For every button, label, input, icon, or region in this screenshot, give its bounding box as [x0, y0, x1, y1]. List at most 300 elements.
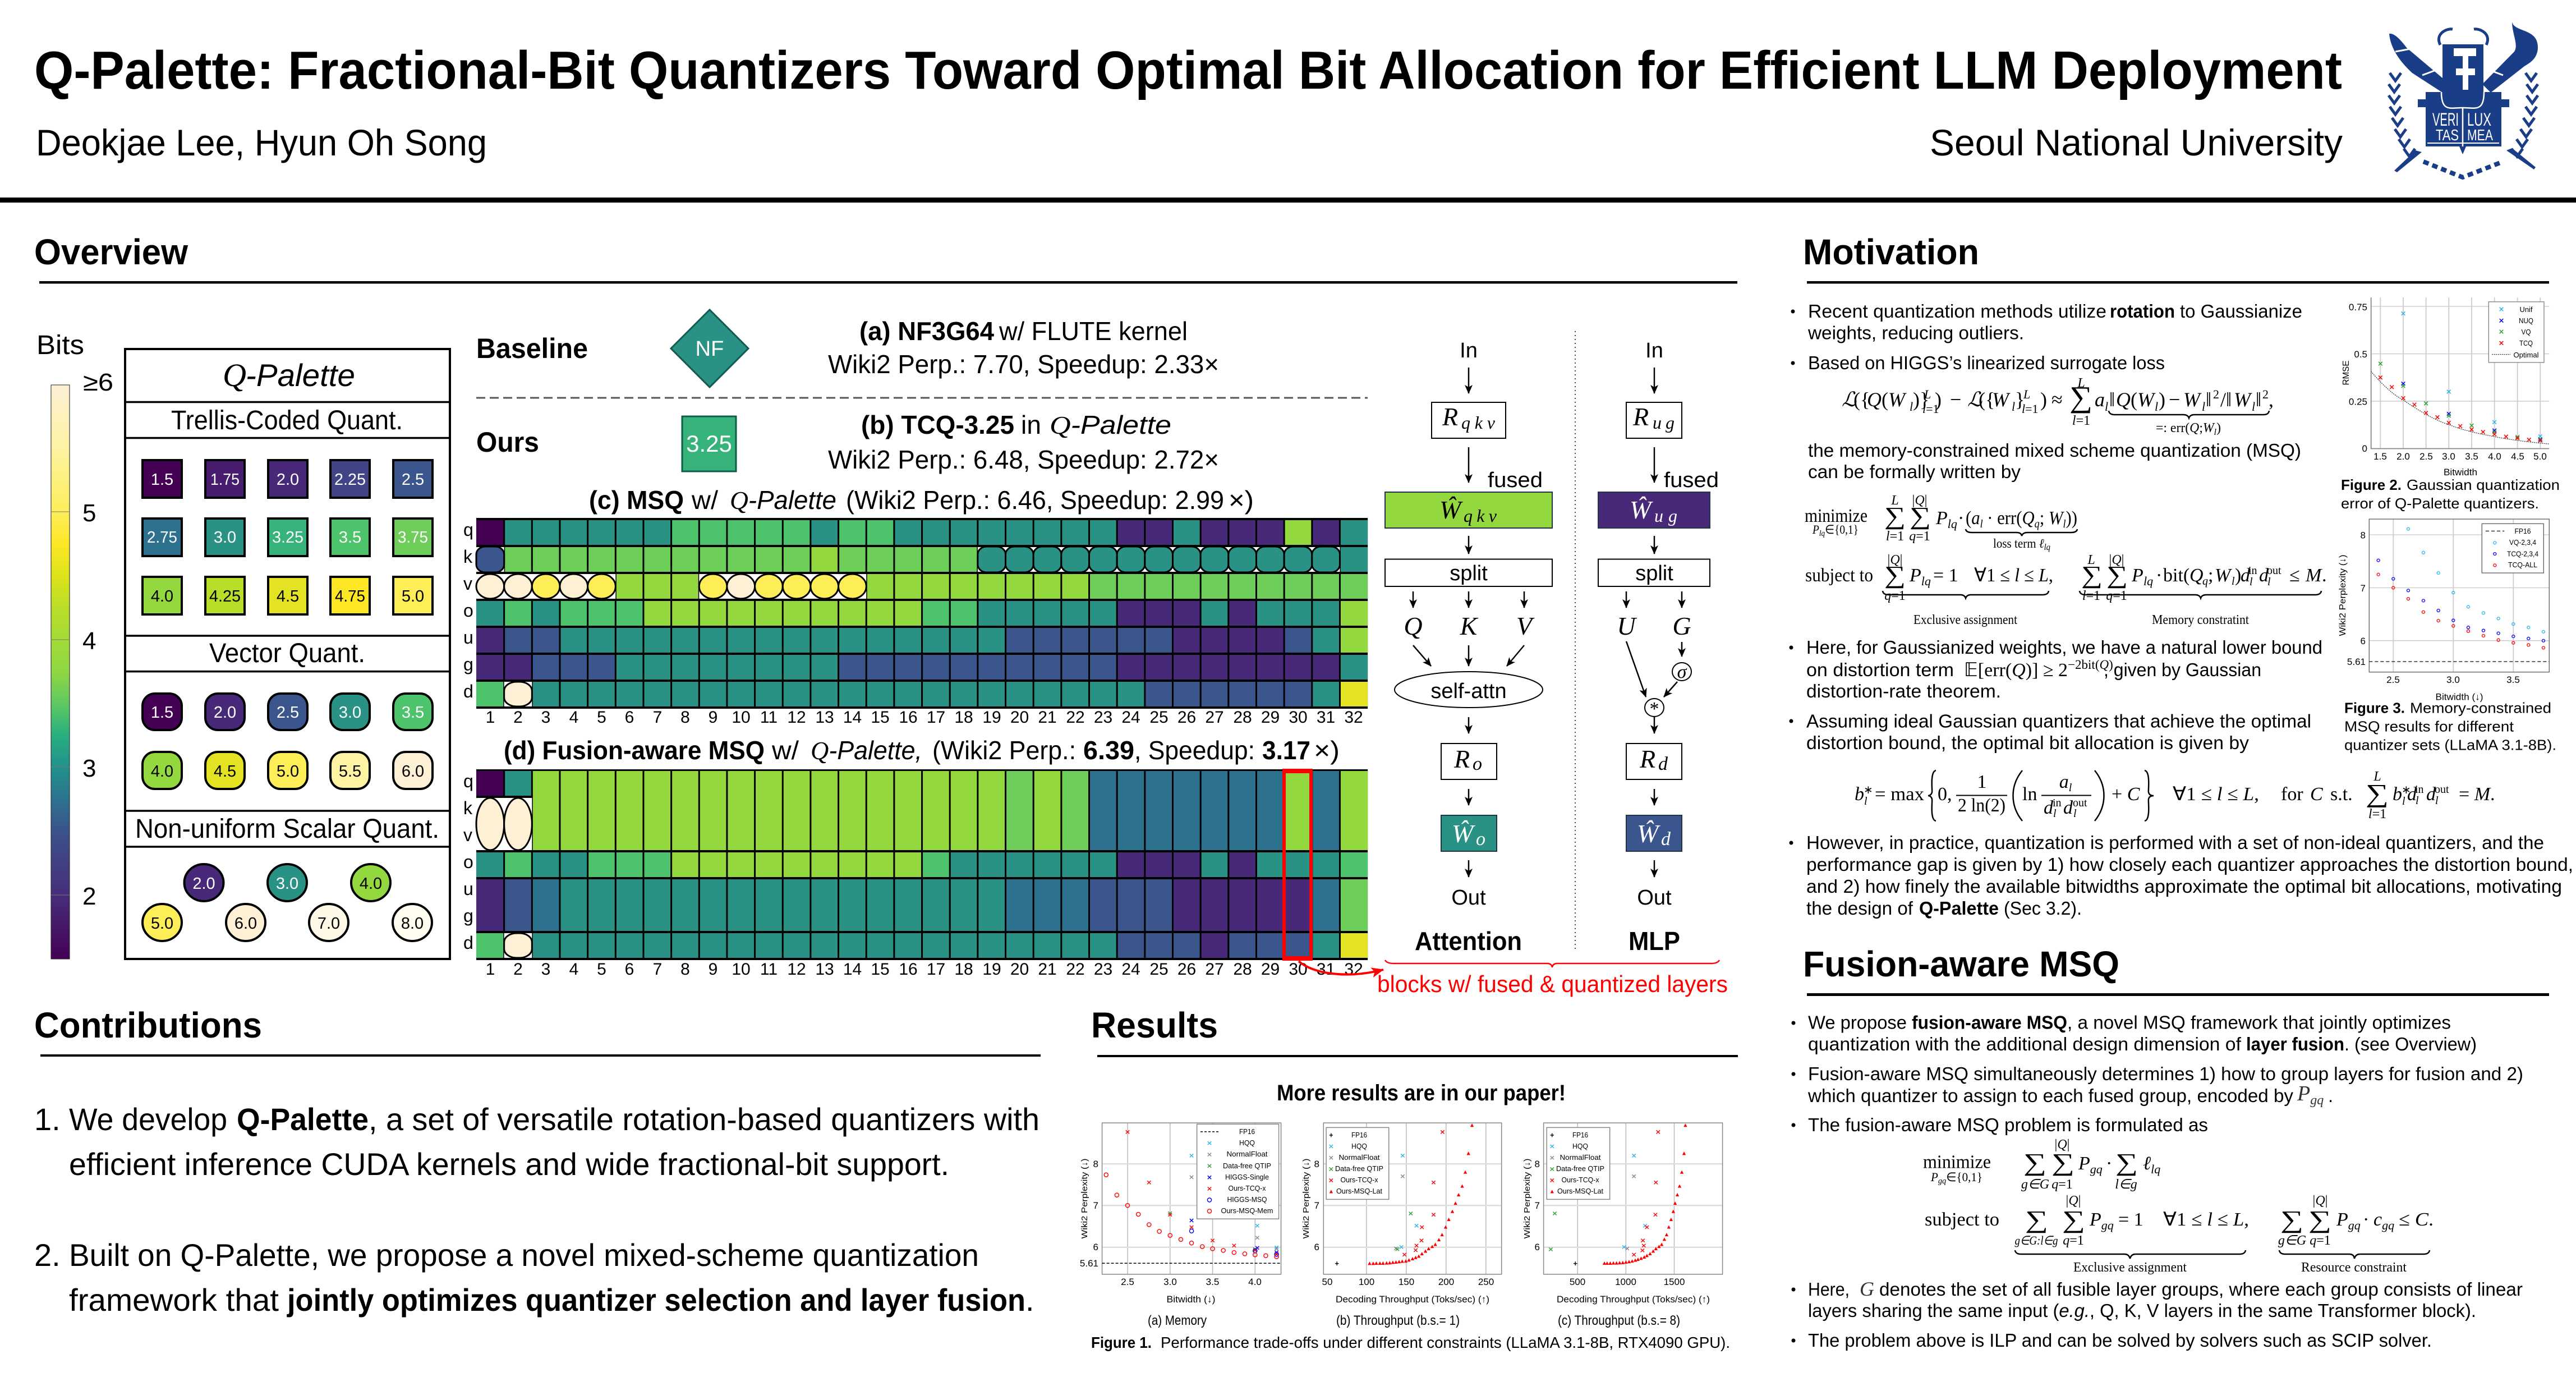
equation: surrogate loss: L — [1924, 387, 1931, 401]
chart: (b) Throughput b.s.=1: (b) Throughput (b.s.= 1) — [1336, 1313, 1460, 1328]
chart: (a) Memory: Ours-TCQ-x — [1229, 1184, 1266, 1192]
chart: Figure 3 quantizer sets: 7 — [2361, 583, 2366, 594]
column labels (d): 23 — [1094, 960, 1112, 979]
equation: surrogate loss: ( — [2131, 388, 2137, 411]
column labels (c): 24 — [1121, 708, 1140, 727]
chart: Figure 2 RMSE — [2342, 297, 2549, 478]
equation: MSQ optimization: d — [2241, 565, 2251, 586]
caption: Figure 2: error of Q-Palette quantizers. — [2341, 495, 2539, 512]
equation: fusion-aware optimization: gq — [2382, 1218, 2394, 1232]
chart: (b) Throughput b.s.=1: Decoding Throughput (Toks/sec) (↑) — [1336, 1294, 1489, 1305]
equation: optimal bit allocation: ∗ — [1864, 784, 1873, 796]
equation: surrogate loss: L — [2077, 376, 2085, 391]
equation: fusion-aware optimization: minimize — [1923, 1151, 1991, 1173]
chart: Figure 2 RMSE: 5.0 — [2533, 451, 2547, 462]
equation: fusion-aware optimization: gq — [1938, 1177, 1947, 1186]
swatch labels: vector: 5.0 — [277, 763, 299, 781]
equation: surrogate loss: /‖ — [2220, 388, 2232, 411]
labels: Q K V: Q — [1404, 612, 1423, 640]
bullet: grouping: P — [2297, 1082, 2310, 1105]
equation: surrogate loss: ) — [1935, 388, 1942, 411]
equation: fusion-aware optimization: gq — [2101, 1218, 2114, 1232]
equation: MSQ optimization: P — [1910, 565, 1921, 586]
row labels (d): v — [463, 825, 472, 845]
chart: (c) Throughput b.s.=8 — [1522, 1123, 1723, 1328]
column labels (c): 9 — [709, 708, 717, 727]
contribution 2: Built on Q-Palette, we propose a novel mixed-scheme quantization — [69, 1237, 979, 1273]
column labels (d): 1 — [486, 960, 495, 979]
diagram: MLP block — [1598, 339, 1719, 956]
column labels (c): 12 — [787, 708, 806, 727]
icon: university emblem: VERI — [2432, 109, 2459, 130]
chart: (b) Throughput b.s.=1: 200 — [1438, 1277, 1454, 1287]
bullet: rotation: weights, reducing outliers. — [1807, 322, 2024, 343]
chart: (c) Throughput b.s.=8: NormalFloat — [1560, 1153, 1601, 1162]
equation: MSQ optimization: . — [2322, 565, 2327, 586]
chart: (b) Throughput b.s.=1: 250 — [1478, 1277, 1494, 1287]
chart: Figure 3 quantizer sets: VQ-2,3,4 — [2509, 538, 2536, 547]
chart: (b) Throughput b.s.=1: 100 — [1359, 1277, 1374, 1287]
swatch labels: vector — [151, 704, 424, 781]
section: Contributions: Contributions — [34, 1005, 262, 1045]
label: fused: fused — [1488, 469, 1543, 492]
equation: MSQ optimization: L — [2087, 553, 2095, 567]
box: W ug: ug — [1654, 506, 1677, 526]
chart: (b) Throughput b.s.=1: 150 — [1399, 1277, 1414, 1287]
equation: MSQ optimization: |Q| — [1888, 553, 1902, 567]
node: self-attn — [1395, 672, 1543, 708]
equation: surrogate loss: ) — [2040, 388, 2047, 411]
bullet: layer groups: layers sharing the same input (e.g., Q, K, V layers in the same Transformer block). — [1808, 1300, 2476, 1321]
equation: fusion-aware optimization: ∑ — [2023, 1149, 2046, 1176]
swatch labels: trellis-coded: 3.0 — [214, 529, 236, 547]
equation: fusion-aware optimization: ∑ — [2025, 1206, 2048, 1233]
equation: MSQ optimization: ≤ — [2289, 565, 2300, 586]
swatches: trellis-coded — [142, 460, 433, 614]
equation: fusion-aware optimization: ≤ C. — [2399, 1209, 2434, 1230]
chart: (c) Throughput b.s.=8: HQQ — [1572, 1142, 1588, 1150]
labels: Q K V: V — [1516, 612, 1535, 640]
bullet: formulation: The fusion-aware MSQ problem is formulated as — [1808, 1114, 2208, 1135]
chart: Figure 2 RMSE: 1.5 — [2373, 451, 2387, 462]
equation: MSQ optimization: ∑ — [1884, 561, 1906, 589]
chart: Figure 2 RMSE: 0.25 — [2349, 396, 2367, 407]
column labels (c): 10 — [732, 708, 751, 727]
panel: Q-Palette quantizer legend — [125, 349, 450, 959]
bullet: grouping: . — [2328, 1085, 2333, 1106]
equation: fusion-aware optimization: P — [2078, 1153, 2090, 1174]
bullet: layer groups: Here, — [1808, 1279, 1850, 1300]
equation: surrogate loss: ∑ — [2069, 381, 2092, 414]
colorbar: Bits: ≥6 — [83, 369, 113, 396]
column labels (d): 12 — [787, 960, 806, 979]
title: Q-Palette: Fractional-Bit Quantizers Toward Optimal Bit Allocation for Efficient LLM Deployment — [34, 40, 2342, 100]
equation: MSQ optimization: q — [2202, 575, 2208, 588]
equation: surrogate loss: =: err(Q;W — [2156, 421, 2214, 435]
equation: MSQ optimization: ∈{0,1} — [1825, 522, 1859, 536]
row labels (d): k — [463, 798, 473, 818]
equation: surrogate loss: − — [1950, 388, 1961, 411]
contribution 1: , a set of versatile rotation-based quantizers with — [369, 1102, 1039, 1137]
swatch labels: vector: 2.0 — [214, 704, 236, 722]
callout: blocks with fused and quantized layers: blocks w/ fused & quantized layers — [1377, 971, 1728, 997]
column labels (c): 30 — [1289, 708, 1308, 727]
equation: optimal bit allocation: ∑ — [2366, 779, 2389, 807]
equation: fusion-aware optimization: g∈G — [2021, 1177, 2049, 1192]
column labels (d): 5 — [597, 960, 606, 979]
column labels (d): 28 — [1233, 960, 1252, 979]
chart: (c) Throughput b.s.=8: Ours-MSQ-Lat — [1557, 1187, 1603, 1195]
box: W qkv — [1385, 492, 1552, 528]
equation: optimal bit allocation — [1855, 769, 2495, 821]
equation: optimal bit allocation: out — [2435, 783, 2449, 796]
box: split — [1385, 559, 1552, 586]
equation: MSQ optimization: q=1 — [2106, 589, 2127, 603]
chart: (c) Throughput b.s.=8: 1500 — [1664, 1277, 1685, 1287]
swatches: vector — [142, 694, 433, 789]
equation: fusion-aware optimization: = 1 — [2118, 1209, 2143, 1230]
bullet: grouping: Fusion-aware MSQ simultaneously determines 1) how to group layers for fusion and 2) — [1808, 1063, 2523, 1084]
column labels (c): 4 — [569, 708, 578, 727]
swatch labels: non-uniform scalar — [151, 875, 424, 933]
column labels (d): 18 — [954, 960, 973, 979]
chart: (b) Throughput b.s.=1: Data-free QTIP — [1335, 1164, 1383, 1173]
heatmap: (c) MSQ — [463, 518, 1368, 727]
row labels (c): g — [463, 654, 473, 674]
chart: Figure 2 RMSE: VQ — [2521, 328, 2531, 336]
equation: optimal bit allocation: C — [2310, 784, 2323, 805]
chart: Figure 3 quantizer sets — [2338, 519, 2549, 703]
chart: (a) Memory: 5.61 — [1080, 1258, 1098, 1269]
contribution 2: jointly optimizes quantizer selection and layer fusion — [287, 1282, 1025, 1318]
contribution 1: 1. — [34, 1102, 61, 1137]
equation: surrogate loss: l — [2155, 400, 2158, 414]
equation: MSQ optimization: lq — [1921, 574, 1931, 588]
section: Motivation bullets — [1790, 301, 2573, 919]
contribution 1: efficient inference CUDA kernels and wide fractional-bit support. — [69, 1146, 949, 1182]
equation: surrogate loss: a — [2095, 388, 2105, 411]
node: multiply: * — [1649, 699, 1659, 719]
chart: Figure 2 RMSE: Optimal — [2513, 351, 2539, 359]
equation: MSQ optimization: in — [2248, 565, 2257, 577]
equation: surrogate loss: ) — [2216, 421, 2221, 435]
swatch labels: trellis-coded: 4.5 — [277, 588, 299, 605]
equation: surrogate loss: ({ — [1979, 388, 1995, 411]
chart: (b) Throughput b.s.=1: NormalFloat — [1338, 1153, 1380, 1162]
equation: optimal bit allocation: l — [2069, 782, 2072, 794]
bullet: fusion-aware proposal: fusion-aware MSQ — [1912, 1012, 2067, 1032]
chart: Figure 3 quantizer sets: 8 — [2361, 530, 2366, 541]
bullet: layer groups: denotes the set of all fusible layer groups, where each group consists of linear — [1879, 1279, 2523, 1300]
column labels (c): 23 — [1094, 708, 1112, 727]
chart: (c) Throughput b.s.=8: FP16 — [1572, 1131, 1588, 1139]
equation: surrogate loss: , — [2269, 388, 2274, 411]
icon: university emblem: LUX — [2467, 109, 2491, 130]
equation: MSQ optimization: l — [1980, 518, 1983, 530]
column labels (c): 32 — [1344, 708, 1363, 727]
bullet: lower bound: −2bit(Q) — [2068, 658, 2113, 672]
row labels (c): v — [463, 573, 472, 594]
labels: U G — [1617, 612, 1691, 640]
bullet: non-ideal quantizers: the design of — [1806, 898, 1913, 919]
chart: (c) Throughput b.s.=8: Ours-TCQ-x — [1562, 1176, 1599, 1184]
equation: MSQ optimization: l — [2232, 575, 2235, 588]
equation: surrogate loss: =1 — [2025, 402, 2039, 416]
equation: surrogate loss: ℒ — [1967, 388, 1982, 411]
swatch labels: trellis-coded: 4.25 — [209, 588, 241, 605]
equation: fusion-aware optimization: g∈G — [2278, 1233, 2306, 1248]
equation: optimal bit allocation: a — [2059, 772, 2069, 792]
equation: surrogate loss: l — [2105, 400, 2108, 414]
equation: MSQ optimization: q=1 — [1909, 529, 1930, 544]
equation: optimal bit allocation: d — [2044, 797, 2053, 818]
column labels (d): 30 — [1289, 960, 1308, 979]
row labels (d): d — [463, 933, 473, 953]
column labels (d): 7 — [653, 960, 662, 979]
column labels (d): 14 — [843, 960, 862, 979]
contribution 2 — [34, 1237, 1034, 1318]
heading: (d) Fusion-aware MSQ: 6.39 — [1083, 736, 1134, 765]
colorbar: Bits: Bits — [36, 331, 84, 360]
swatch labels: non-uniform scalar: 7.0 — [318, 915, 340, 933]
equation: surrogate loss: L — [2023, 387, 2030, 401]
box: R o — [1441, 744, 1497, 779]
chart: (b) Throughput b.s.=1: Wiki2 Perplexity (↓) — [1301, 1158, 1311, 1239]
baseline row: NF3G64: (a) NF3G64 — [859, 316, 994, 346]
column labels (c): 21 — [1038, 708, 1057, 727]
column labels (c): 16 — [899, 708, 918, 727]
caption: Figure 1: Performance trade-offs under different constraints (LLaMA 3.1-8B, RTX4090 GPU). — [1161, 1334, 1730, 1351]
equation: fusion-aware optimization: Exclusive assignment — [2073, 1260, 2187, 1275]
equation: surrogate loss: 2 — [2262, 387, 2269, 401]
heading: (c) MSQ: (Wiki2 Perp.: 6.46, Speedup: 2.99 — [846, 485, 1224, 515]
chart: Figure 2 RMSE: 0.75 — [2349, 302, 2367, 313]
equation: MSQ optimization: Memory constratint — [2152, 613, 2249, 627]
labels: U G: U — [1617, 612, 1637, 640]
equation: optimal bit allocation: b — [1855, 784, 1864, 805]
row labels (c): q — [463, 520, 473, 540]
column labels (c): 31 — [1317, 708, 1335, 727]
chart: Figure 3 quantizer sets: TCQ-2,3,4 — [2507, 550, 2538, 558]
equation: MSQ optimization: P — [1936, 508, 1948, 529]
column labels (c): 17 — [927, 708, 945, 727]
chart: Figure 3 quantizer sets: Wiki2 Perplexity (↓) — [2338, 554, 2348, 636]
equation: fusion-aware optimization: c — [2373, 1209, 2382, 1230]
swatch labels: trellis-coded: 4.0 — [151, 588, 173, 605]
equation: optimal bit allocation: l — [2073, 807, 2077, 820]
equation: surrogate loss: W — [1992, 388, 2011, 411]
text: MSQ definition — [1808, 440, 2301, 482]
row labels (c): u — [463, 627, 473, 648]
box: W d: Ŵ — [1637, 819, 1660, 848]
icon: 3.25 square — [682, 416, 736, 471]
equation: surrogate loss: } — [2015, 388, 2025, 411]
bullet: lower bound — [1790, 637, 2322, 701]
arrow: block 30 to fused layers — [1299, 961, 1383, 975]
chart: (b) Throughput b.s.=1: Ours-TCQ-x — [1341, 1176, 1378, 1184]
colorbar: Bits: 4 — [82, 627, 96, 655]
equation: surrogate loss: − — [2169, 388, 2180, 411]
diagram: MLP block: Out — [1637, 886, 1672, 910]
equation: fusion-aware optimization: P — [2336, 1209, 2348, 1230]
equation: optimal bit allocation: l=1 — [2368, 807, 2386, 821]
equation: surrogate loss: l — [2012, 400, 2015, 414]
section: Contributions — [34, 1005, 1041, 1318]
chart: Figure 2 RMSE: 3.0 — [2442, 451, 2455, 462]
chart: Figure 3 quantizer sets: 3.5 — [2506, 674, 2520, 685]
caption: Figure 1: Figure 1. — [1091, 1334, 1152, 1351]
chart: Figure 2 RMSE: 0 — [2362, 443, 2367, 454]
equation: optimal bit allocation: d — [2063, 797, 2073, 818]
equation: fusion-aware optimization: |Q| — [2313, 1194, 2327, 1208]
column labels (d): 16 — [899, 960, 918, 979]
icon: university emblem: MEA — [2467, 126, 2493, 144]
chart: (b) Throughput b.s.=1: Ours-MSQ-Lat — [1336, 1187, 1382, 1195]
chart: (a) Memory: Wiki2 Perplexity (↓) — [1080, 1158, 1089, 1239]
equation: MSQ optimization: out — [2267, 565, 2281, 577]
bullet: fusion-aware proposal: layer fusion — [2246, 1034, 2344, 1054]
chart: (b) Throughput b.s.=1: FP16 — [1351, 1131, 1367, 1139]
chart: Figure 3 quantizer sets: 6 — [2361, 636, 2366, 646]
equation: MSQ optimization: q=1 — [1884, 589, 1906, 603]
equation: MSQ optimization: ∑ — [1910, 502, 1931, 530]
equation: optimal bit allocation: ∀1 ≤ l ≤ L, — [2173, 784, 2259, 805]
equation: MSQ optimization: ) — [2235, 565, 2241, 586]
chart: Figure 2 RMSE: 4.0 — [2488, 451, 2501, 462]
equation: surrogate loss: l — [1922, 402, 1926, 416]
row labels (d): g — [463, 906, 473, 926]
equation: MSQ optimization: l — [2267, 576, 2271, 588]
column labels (d): 31 — [1317, 960, 1335, 979]
column labels (d): 26 — [1177, 960, 1196, 979]
chart: (a) Memory: HQQ — [1239, 1139, 1255, 1147]
box: R ug: R — [1632, 402, 1649, 431]
equation: MSQ optimization: l=1 — [1886, 529, 1904, 544]
equation: surrogate loss: ℒ — [1842, 388, 1857, 411]
chart: (a) Memory: 7 — [1093, 1200, 1098, 1211]
chart: Figure 3 quantizer sets: FP16 — [2514, 527, 2531, 535]
swatches: non-uniform scalar — [142, 864, 432, 941]
section: Results — [1080, 1005, 1738, 1351]
column labels (d): 22 — [1066, 960, 1085, 979]
label: MLP: MLP — [1629, 926, 1680, 956]
swatch labels: non-uniform scalar: 2.0 — [192, 875, 215, 893]
chart: (a) Memory — [1080, 1123, 1281, 1328]
chart: Figure 2 RMSE: RMSE — [2342, 360, 2351, 385]
contribution 1: We develop — [69, 1102, 227, 1137]
diagram: MLP block: In — [1645, 339, 1663, 362]
equation: MSQ optimization: ∑ — [2081, 561, 2103, 589]
box: W d — [1626, 815, 1682, 851]
equation: fusion-aware optimization: l∈g — [2115, 1177, 2137, 1192]
equation: MSQ optimization: q — [2035, 518, 2040, 530]
chart: (b) Throughput b.s.=1: HQQ — [1351, 1142, 1367, 1150]
heading: (c) MSQ: (c) MSQ — [589, 485, 684, 515]
equation: surrogate loss: Q — [2116, 388, 2131, 411]
equation: fusion-aware optimization: |Q| — [2055, 1137, 2069, 1152]
affiliation: Seoul National University — [1930, 122, 2343, 163]
column labels (d): 6 — [625, 960, 634, 979]
equation: MSQ optimization: P — [2131, 565, 2143, 586]
equation: MSQ optimization: d — [2259, 565, 2269, 586]
equation: optimal bit allocation: s.t. — [2330, 784, 2353, 805]
column labels (d): 10 — [732, 960, 751, 979]
equation: optimal bit allocation: for — [2281, 784, 2303, 805]
equation: surrogate loss: W — [2234, 388, 2252, 411]
swatch labels: non-uniform scalar: 4.0 — [360, 875, 382, 893]
contribution 2: . — [1025, 1282, 1034, 1318]
equation: fusion-aware optimization: ∑ — [2280, 1206, 2303, 1233]
diagram: attention block — [1385, 339, 1552, 956]
equation: MSQ optimization: ∑ — [1884, 502, 1906, 530]
equation: MSQ optimization: L — [1890, 493, 1899, 508]
chart: Figure 3 quantizer sets: 3.0 — [2446, 674, 2460, 685]
bullet: fusion-aware proposal: We propose — [1808, 1012, 1907, 1032]
bullet: rotation: to Gaussianize — [2180, 301, 2302, 322]
equation: fusion-aware optimization: q=1 — [2063, 1233, 2084, 1248]
bullet: ideal quantizers — [1790, 710, 2311, 753]
bullet: ILP: The problem above is ILP and can be solved by solvers such as SCIP solver. — [1808, 1330, 2432, 1351]
equation: fusion-aware optimization: ∑ — [2308, 1206, 2331, 1233]
column labels (c): 19 — [982, 708, 1001, 727]
swatch labels: non-uniform scalar: 8.0 — [401, 915, 424, 933]
box: W ug — [1598, 492, 1710, 528]
chart: (c) Throughput b.s.=8: 6 — [1535, 1242, 1540, 1252]
diagram: attention block: In — [1460, 339, 1478, 362]
chart: (a) Memory: 3.0 — [1163, 1277, 1177, 1287]
swatch labels: vector: 4.5 — [214, 763, 236, 781]
chart: (a) Memory: 2.5 — [1121, 1277, 1134, 1287]
swatch labels: non-uniform scalar: 5.0 — [151, 915, 173, 933]
equation: surrogate loss: )} — [1913, 388, 1929, 411]
brace: blocks — [1385, 960, 1719, 967]
swatch labels: non-uniform scalar: 3.0 — [276, 875, 298, 893]
equation: MSQ optimization: )) — [2066, 508, 2077, 529]
equation: MSQ optimization: |Q| — [1912, 493, 1927, 508]
equation: optimal bit allocation: in — [2415, 783, 2424, 796]
node: sigma: σ — [1677, 662, 1687, 682]
equation: surrogate loss: ‖ — [2256, 388, 2261, 411]
chart: (b) Throughput b.s.=1 — [1301, 1123, 1502, 1328]
column labels (c): 14 — [843, 708, 862, 727]
caption: Figure 3 — [2344, 699, 2556, 753]
column labels (d): 24 — [1121, 960, 1140, 979]
bullet: layer groups: G — [1860, 1278, 1874, 1300]
column labels (c): 29 — [1261, 708, 1280, 727]
equation: optimal bit allocation: = M. — [2459, 784, 2495, 805]
heading: (d) Fusion-aware MSQ: 3.17 — [1262, 736, 1310, 765]
column labels (c): 20 — [1010, 708, 1029, 727]
bullet: lower bound: Here, for Gaussianized weights, we have a natural lower bound — [1806, 637, 2322, 658]
chart: (a) Memory: Data-free QTIP — [1223, 1162, 1271, 1170]
equation: optimal bit allocation: d — [2407, 784, 2417, 805]
icon: university emblem — [2389, 22, 2538, 177]
swatch labels: vector: 4.0 — [151, 763, 173, 781]
box: R qkv: R — [1442, 402, 1458, 431]
equation: MSQ optimization: lq — [1819, 529, 1825, 538]
equation: optimal bit allocation: = max — [1875, 784, 1924, 805]
column labels (d): 15 — [871, 960, 890, 979]
column labels (d): 32 — [1344, 960, 1363, 979]
equation: MSQ optimization: |Q| — [2109, 553, 2124, 567]
chart: Figure 2 RMSE: Bitwidth — [2444, 467, 2477, 478]
swatch labels: trellis-coded: 1.5 — [151, 471, 173, 489]
bullet: lower bound: on distortion term — [1806, 659, 1954, 680]
contribution 2: 2. — [34, 1237, 61, 1273]
text: MSQ definition: can be formally written by — [1808, 461, 2021, 482]
equation: MSQ optimization: ; — [2208, 565, 2213, 586]
swatch labels: trellis-coded: 5.0 — [402, 588, 424, 605]
